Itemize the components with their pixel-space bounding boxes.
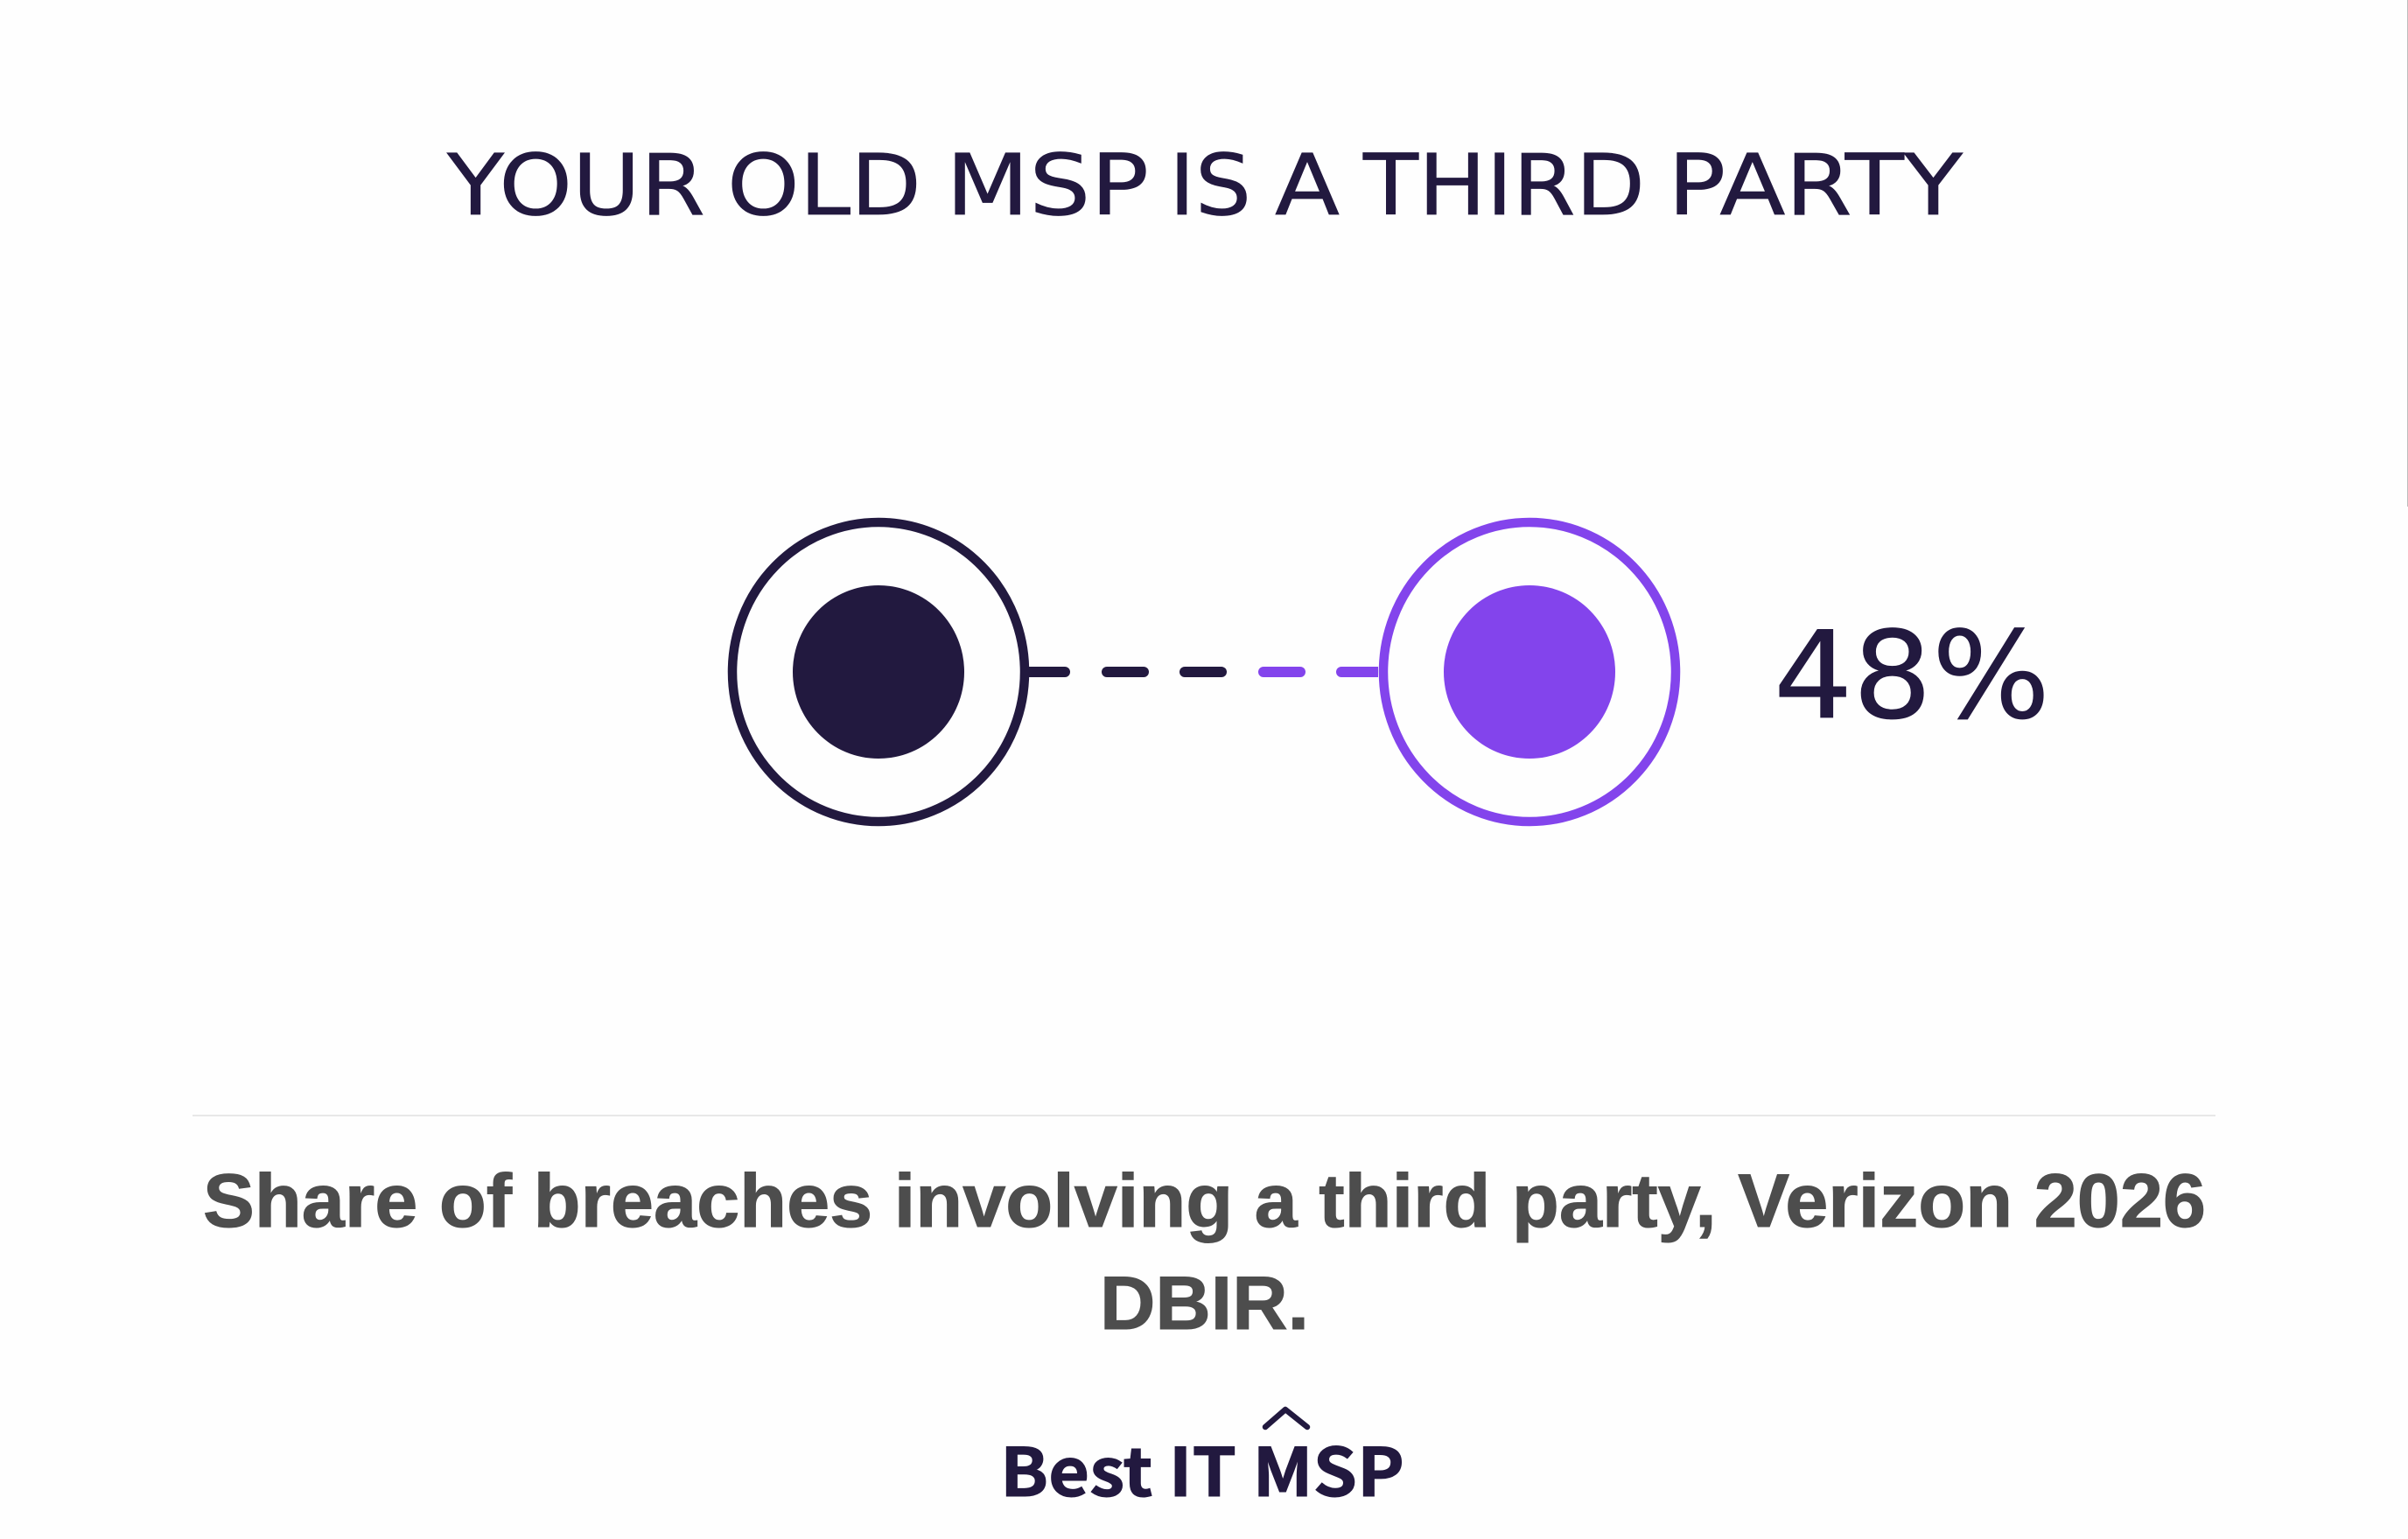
statistic: 48%: 48%: [1774, 605, 2050, 746]
caption: Share of breaches involving a third party, Verizon 2026: [203, 1159, 2206, 1243]
diagram: third-party connection: [732, 522, 1676, 822]
title: OLD: [727, 136, 921, 234]
logo wordmark: Best IT MSP: [1000, 1419, 1404, 1515]
title: IS: [1169, 136, 1251, 234]
title: [446, 136, 1963, 234]
dashed connector: [1028, 667, 1378, 677]
divider: [192, 1115, 2216, 1116]
title: THIRD: [1362, 136, 1645, 234]
title: MSP: [946, 136, 1149, 234]
icon: roof chevron: [1265, 1410, 1307, 1427]
node: third party (purple): [1383, 522, 1676, 822]
title: PARTY: [1668, 136, 1963, 234]
node: your organisation (dark): [732, 522, 1025, 822]
caption: DBIR.: [1100, 1262, 1309, 1346]
caption: [203, 1159, 2206, 1346]
title: A: [1275, 136, 1340, 234]
logo: Best IT MSP: [1000, 1410, 1404, 1515]
title: YOUR: [446, 136, 705, 234]
